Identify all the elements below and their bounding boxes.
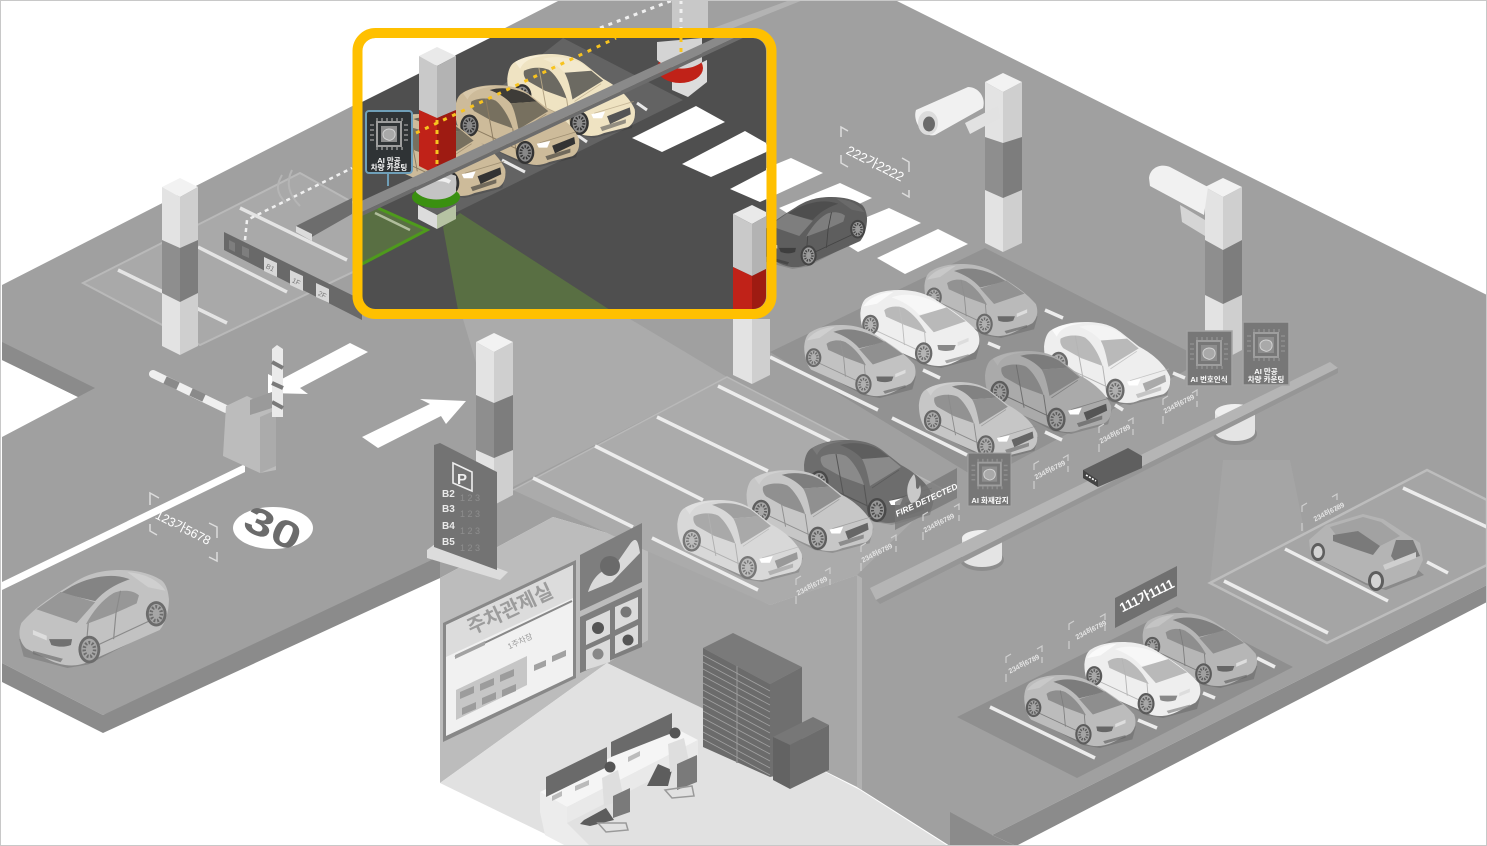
plate: 111가1111: 111가1111 <box>1117 576 1177 615</box>
white corner <box>362 38 490 102</box>
sign: parking levels: B3 <box>442 504 455 515</box>
fire alert box <box>895 468 957 530</box>
sign: parking levels: 1 2 3 <box>460 493 480 503</box>
ceiling dotted line left with switch <box>245 168 352 241</box>
main video wall <box>443 560 576 742</box>
plate: 111가1111 <box>1115 566 1177 628</box>
plate: 123가5678 <box>150 493 217 561</box>
pillar: entrance <box>476 333 513 505</box>
desk <box>540 727 698 807</box>
car on fire <box>804 440 959 530</box>
monitors <box>546 747 607 797</box>
operator 1 <box>580 762 630 832</box>
parking zone: far right <box>1210 460 1487 643</box>
tan car partial <box>405 114 506 198</box>
AI chip: frame callout: 차량 카운팅 <box>371 162 407 172</box>
sign: parking levels: B5 <box>442 537 455 548</box>
cream car <box>507 54 636 138</box>
control room <box>440 517 948 846</box>
icon: flame <box>907 474 921 503</box>
road markings <box>2 343 466 590</box>
slab edges <box>2 342 1487 846</box>
UPS <box>773 717 829 745</box>
tan car <box>455 85 580 167</box>
side screen: video call <box>580 588 642 673</box>
plate: 123가5678: 123가5678 <box>153 508 213 548</box>
cars: front row <box>677 470 873 582</box>
highlight frame <box>358 33 772 314</box>
parking barrier <box>153 345 283 473</box>
crosswalk <box>681 133 968 274</box>
icon: cctv camera <box>915 87 1000 135</box>
small recognized plates: 234허6789 <box>795 574 829 597</box>
icon: P <box>453 463 472 491</box>
small recognized plates: 234허6789 <box>1033 458 1067 481</box>
car on road <box>19 570 169 668</box>
small recognized plates: 234허6789 <box>1312 500 1346 523</box>
icon: cctv camera <box>1149 166 1208 236</box>
main video wall: 1주차장 <box>506 631 535 651</box>
bay lines <box>502 103 647 172</box>
direction sign board: B1 <box>264 263 275 274</box>
AI chip: number recognition <box>1187 331 1232 386</box>
sign: parking levels: 1 2 3 <box>460 543 480 553</box>
AI chip: fire detection <box>968 453 1011 506</box>
small recognized plates: 234허6789 <box>1074 618 1108 641</box>
network switch <box>1083 448 1142 487</box>
ceiling beam <box>870 362 1338 604</box>
cars: bottom right <box>1024 613 1257 748</box>
side screen: chart <box>580 523 642 611</box>
green zone <box>362 208 610 310</box>
light beam below frame <box>463 319 727 487</box>
AI chip: number recognition: AI 번호인식 <box>1190 374 1228 384</box>
pillar: left <box>162 178 198 355</box>
small recognized plates: 234허6789 <box>1007 652 1041 675</box>
sign: parking levels: B2 <box>442 489 455 500</box>
cylinder mounts <box>960 404 1257 571</box>
sign: parking levels: P <box>457 471 467 488</box>
title: 주차관제실 <box>464 580 557 639</box>
small recognized plates: 234허6789 <box>1098 422 1132 445</box>
operator 2 <box>647 728 697 798</box>
green column <box>412 173 460 229</box>
top pillar stub and beam above frame <box>600 0 803 38</box>
yellow dotted lines <box>416 38 681 175</box>
red column front <box>733 205 766 309</box>
hatchback <box>1309 514 1424 591</box>
pillar: lower frame base <box>733 319 770 384</box>
plate: 222가2222: 222가2222 <box>844 143 907 184</box>
parking zone: bottom right <box>957 607 1293 778</box>
small recognized plates: 234허6789 <box>922 511 956 534</box>
sign: parking levels: B4 <box>442 521 455 532</box>
server racks <box>703 633 829 789</box>
plate: 222가2222 <box>841 127 909 197</box>
operators desk <box>540 713 698 846</box>
arrow: exit <box>268 343 368 394</box>
direction sign board <box>224 232 362 320</box>
small recognized plates: 234허6789 <box>860 541 894 564</box>
plate brackets <box>796 390 1337 682</box>
small recognized plates: 234허6789 <box>1162 392 1196 415</box>
red column back <box>657 38 707 97</box>
small recognized plates <box>795 392 1346 675</box>
sign: parking levels <box>427 443 508 580</box>
direction sign board: 1F <box>291 278 301 287</box>
AI chip: frame callout <box>366 111 412 186</box>
AI chip: vacancy counting <box>1243 322 1289 385</box>
red column <box>419 47 456 175</box>
speed limit 30: 30 <box>238 497 308 560</box>
sign: parking levels: 1 2 3 <box>460 526 480 536</box>
cars: main bays <box>804 264 1171 460</box>
beam <box>362 38 742 216</box>
crosswalk stripes <box>632 106 766 202</box>
parking bay <box>420 38 683 215</box>
parking zone: top left <box>83 173 420 345</box>
pillar with camera: far right <box>1149 166 1242 360</box>
AI chip: frame callout: AI 만공 <box>377 155 401 165</box>
highlighted zone <box>362 38 766 309</box>
parking zone: empty bays <box>513 377 945 605</box>
arrow: entrance <box>362 399 466 448</box>
direction sign board: 2F <box>317 291 327 300</box>
AI chip: vacancy counting: 차량 카운팅 <box>1248 374 1284 384</box>
dark road <box>362 38 766 309</box>
AI chip: fire detection: AI 화재감지 <box>971 495 1009 505</box>
sign: parking levels: 1 2 3 <box>460 509 480 519</box>
fire label: FIRE DETECTED <box>894 481 959 519</box>
AI chip: vacancy counting: AI 만공 <box>1254 366 1278 376</box>
parking zone: main bays <box>770 248 1205 480</box>
dark car at crosswalk <box>757 197 867 269</box>
pillar with camera: centre right <box>915 73 1022 252</box>
